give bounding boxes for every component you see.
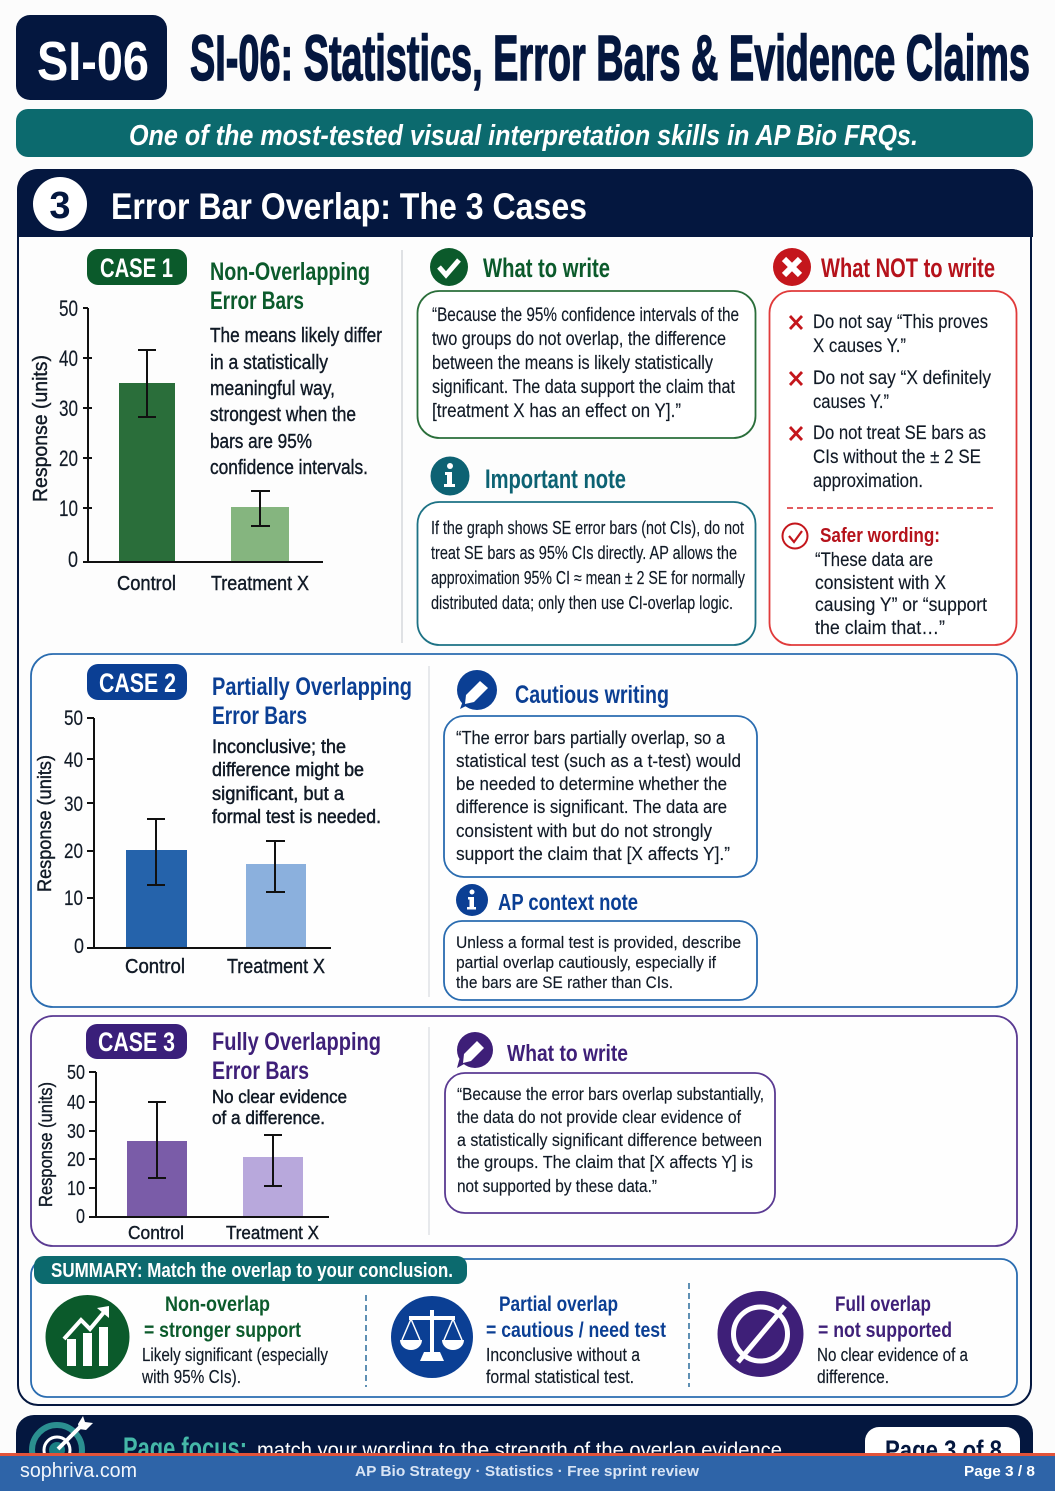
what to write heading: What to write — [483, 253, 610, 283]
case 3 bar chart: Response (units) — [36, 1082, 56, 1207]
summary: full overlap: No clear evidence of a — [817, 1345, 969, 1365]
cautious writing heading — [457, 670, 669, 710]
case 2 bar chart: 20 — [64, 840, 83, 863]
warnings list: approximation. — [813, 471, 923, 492]
case 2 bar chart — [35, 707, 331, 978]
safer wording: causing Y” or “support — [815, 595, 988, 616]
summary: partial overlap: Partial overlap — [499, 1293, 618, 1316]
case 3 description: No clear evidence — [212, 1086, 347, 1107]
case 3 bar chart: Control — [128, 1223, 184, 1243]
case 1 bar chart: 10 — [59, 496, 78, 521]
important note box: distributed data; only then use CI-overlap logic. — [431, 593, 733, 613]
safer wording — [782, 524, 988, 639]
case 3 what to write box: “Because the error bars overlap substantially, — [457, 1084, 764, 1104]
case 1 label — [87, 249, 187, 285]
case 3 what to write box: not supported by these data.” — [457, 1176, 657, 1196]
summary: non-overlap: Likely significant (especially — [142, 1345, 328, 1365]
what not to write heading — [773, 248, 995, 286]
case 1 bar chart: 30 — [59, 396, 78, 421]
warnings list — [813, 312, 991, 492]
case 3 bar chart: 10 — [67, 1178, 85, 1200]
summary: non-overlap: = stronger support — [144, 1319, 301, 1342]
case 3 bar chart: 40 — [67, 1092, 85, 1114]
case 2 description: formal test is needed. — [212, 807, 381, 828]
cautious writing box: support the claim that [X affects Y].” — [456, 844, 730, 864]
page focus bar: Page focus: — [123, 1432, 247, 1465]
case 1 description — [210, 325, 382, 479]
summary tab — [34, 1256, 467, 1284]
cautious writing box: be needed to determine whether the — [456, 774, 727, 794]
section number — [33, 177, 87, 231]
icon: no symbol — [718, 1291, 804, 1377]
case 3 bar chart: 50 — [67, 1062, 85, 1084]
case 2 label — [87, 664, 187, 700]
summary: full overlap: Full overlap — [835, 1293, 931, 1316]
what to write box: significant. The data support the claim that — [432, 377, 736, 398]
case 3 label: CASE 3 — [98, 1027, 175, 1057]
summary: non-overlap — [46, 1293, 328, 1387]
case 1 title — [210, 258, 370, 315]
page pill: Page 3 of 8 — [885, 1435, 1002, 1465]
case 2 description — [212, 737, 381, 828]
summary: non-overlap: with 95% CIs). — [141, 1367, 241, 1387]
case 2 bar chart: 50 — [64, 707, 83, 730]
section heading: Error Bar Overlap: The 3 Cases — [111, 186, 587, 227]
case 1 bar chart: 50 — [59, 296, 78, 321]
AP context note box — [444, 921, 757, 1000]
safer wording: “These data are — [815, 550, 933, 571]
what not to write box — [770, 291, 1016, 645]
safer wording: the claim that…” — [815, 618, 945, 639]
case 2 bar chart: Response (units) — [35, 755, 56, 892]
summary: partial overlap: = cautious / need test — [486, 1319, 666, 1342]
cautious writing box: difference is significant. The data are — [456, 797, 727, 817]
summary: partial overlap: Inconclusive without a — [486, 1345, 641, 1365]
case 1 description: The means likely differ — [210, 325, 382, 347]
case 2 bar chart: 10 — [64, 887, 83, 910]
important note box: If the graph shows SE error bars (not CIs), do not — [431, 518, 744, 538]
case 1 bar chart: Response (units) — [30, 355, 52, 502]
icon: balance scale — [391, 1296, 473, 1378]
case 3 what to write heading: What to write — [507, 1040, 628, 1066]
case 3 what to write box: a statistically significant difference between — [457, 1130, 762, 1150]
important note box: treat SE bars as 95% CIs directly. AP allows the — [431, 543, 737, 563]
panel: error bar overlap main — [17, 169, 1033, 1405]
x marks — [790, 316, 802, 440]
case 2 description: significant, but a — [212, 784, 344, 805]
case 2 bar chart: 40 — [64, 749, 83, 772]
footer: AP Bio Strategy · Statistics · Free sprint review — [355, 1464, 700, 1480]
summary: partial overlap: formal statistical test. — [486, 1367, 634, 1387]
badge: SI-06 — [16, 15, 167, 100]
case 2 title: Partially Overlapping — [212, 673, 412, 701]
case 1 description: meaningful way, — [210, 378, 335, 400]
case 1 label: CASE 1 — [100, 253, 173, 283]
case 3 title: Fully Overlapping — [212, 1028, 381, 1056]
cautious writing box: “The error bars partially overlap, so a — [456, 728, 726, 748]
what to write box: two groups do not overlap, the difference — [432, 329, 726, 350]
warnings list: Do not say “This proves — [813, 312, 988, 333]
what to write heading — [430, 248, 610, 286]
icon: target and arrow — [32, 1416, 93, 1475]
summary: full overlap: difference. — [817, 1367, 889, 1387]
footer: sophriva.com — [20, 1460, 137, 1482]
summary: partial overlap — [391, 1293, 666, 1387]
case 1 bar chart — [30, 296, 323, 595]
warnings list: causes Y.” — [813, 392, 889, 413]
case 1 bar chart: Treatment X — [211, 573, 309, 595]
AP context note box: the bars are SE rather than CIs. — [456, 974, 673, 992]
page focus bar: match your wording to the strength of the overlap evidence — [257, 1439, 782, 1462]
case 1 title: Non-Overlapping — [210, 258, 370, 286]
case 3 title: Error Bars — [212, 1057, 309, 1085]
case 1 bar chart: 20 — [59, 446, 78, 471]
case 1 bar chart: 40 — [59, 346, 78, 371]
cautious writing box: consistent with but do not strongly — [456, 821, 712, 841]
AP context note box: partial overlap cautiously, especially if — [456, 954, 716, 972]
subtitle banner: One of the most-tested visual interpretation skills in AP Bio FRQs. — [129, 120, 918, 152]
section number: 3 — [49, 185, 71, 227]
case 3 bar chart: 30 — [67, 1121, 85, 1143]
what to write box: between the means is likely statistically — [432, 353, 713, 374]
warnings list: Do not say “X definitely — [813, 368, 991, 389]
cautious writing heading: Cautious writing — [515, 681, 669, 709]
icon: rising chart — [46, 1295, 130, 1379]
case 3 title — [212, 1028, 381, 1085]
case 3 what to write box: the data do not provide clear evidence of — [457, 1107, 741, 1127]
case 1 description: confidence intervals. — [210, 457, 368, 479]
case 2 bar chart: Control — [125, 956, 185, 978]
case 2 title — [212, 673, 412, 730]
subtitle banner — [16, 109, 1033, 157]
summary: full overlap — [718, 1291, 969, 1387]
badge: SI-06: SI-06 — [37, 30, 149, 92]
what to write box — [418, 291, 756, 438]
what not to write heading: What NOT to write — [821, 253, 995, 283]
panel: case 3 — [31, 1016, 1017, 1246]
footer: Page 3 / 8 — [964, 1464, 1035, 1480]
AP context note heading — [456, 884, 638, 916]
case 3 what to write heading — [457, 1032, 628, 1068]
case 3 bar chart — [36, 1062, 329, 1243]
summary: full overlap: = not supported — [818, 1319, 952, 1342]
warnings list: Do not treat SE bars as — [813, 423, 986, 444]
case 3 bar chart: 0 — [76, 1206, 85, 1228]
page focus bar — [16, 1415, 1033, 1491]
AP context note heading: AP context note — [498, 889, 638, 915]
warnings list: X causes Y.” — [813, 336, 906, 357]
case 3 what to write box: the groups. The claim that [X affects Y] is — [457, 1152, 753, 1172]
panel: summary — [31, 1256, 1017, 1397]
case 2 title: Error Bars — [212, 702, 307, 730]
cautious writing box: statistical test (such as a t-test) would — [456, 751, 741, 771]
case 2 bar chart: Treatment X — [227, 956, 325, 978]
case 1 description: bars are 95% — [210, 431, 312, 453]
page pill — [865, 1427, 1020, 1477]
safer wording: Safer wording: — [820, 525, 940, 547]
cautious writing box — [444, 716, 757, 877]
panel: case 2 — [31, 654, 1017, 1007]
case 3 what to write box — [445, 1073, 775, 1213]
important note heading: Important note — [485, 464, 626, 494]
summary: non-overlap: Non-overlap — [165, 1293, 270, 1316]
case 1 title: Error Bars — [210, 287, 304, 315]
case 2 label: CASE 2 — [99, 668, 176, 698]
important note box — [418, 502, 756, 645]
summary tab: SUMMARY: Match the overlap to your conclusion. — [51, 1260, 453, 1282]
important note box: approximation 95% CI ≈ mean ± 2 SE for normally — [431, 568, 745, 588]
footer — [0, 1453, 1055, 1491]
safer wording: consistent with X — [815, 573, 946, 594]
case 3 description — [212, 1086, 347, 1128]
case 1 description: in a statistically — [210, 352, 328, 374]
what to write box: “Because the 95% confidence intervals of the — [432, 305, 739, 326]
case 1 description: strongest when the — [210, 404, 356, 426]
AP context note box: Unless a formal test is provided, describe — [456, 934, 741, 952]
case 2 description: Inconclusive; the — [212, 737, 346, 758]
case 1 bar chart: Control — [117, 573, 176, 595]
case 2 description: difference might be — [212, 760, 364, 781]
important note heading — [430, 456, 626, 496]
what to write box: [treatment X has an effect on Y].” — [432, 401, 681, 422]
case 1 bar chart: 0 — [68, 547, 78, 572]
warnings list: CIs without the ± 2 SE — [813, 447, 981, 468]
case 2 bar chart: 30 — [64, 793, 83, 816]
case 3 bar chart: 20 — [67, 1149, 85, 1171]
case 3 bar chart: Treatment X — [226, 1223, 319, 1243]
case 3 description: of a difference. — [212, 1107, 325, 1128]
case 2 bar chart: 0 — [74, 935, 84, 958]
